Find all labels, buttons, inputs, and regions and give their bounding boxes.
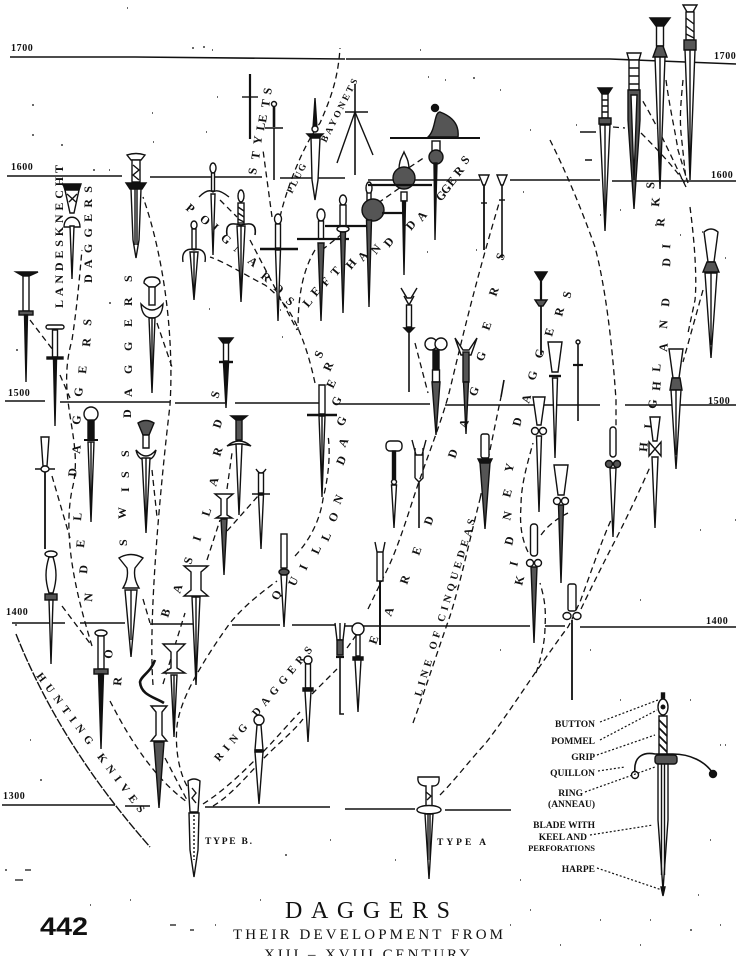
- dagger: Highland 5: [703, 229, 719, 358]
- label: Eared daggers: EARED DAGGERS: [366, 251, 508, 646]
- lineage: Swiss daggers: [143, 197, 172, 685]
- label: Swiss daggers: SWISS DAGGERS: [115, 275, 135, 546]
- dagger: ring 2: [254, 715, 264, 804]
- label: Highland dirks: HIGHLAND DIRKS: [636, 181, 674, 452]
- dagger: ring 1: [303, 656, 313, 742]
- dagger: Highland 2: [627, 53, 641, 209]
- dagger: Highland 3: [650, 18, 670, 189]
- lineage: plug bayonets: [280, 48, 340, 217]
- dagger: quillon straight: [260, 214, 298, 321]
- dagger: Rondel 4: [45, 551, 57, 664]
- dagger: eared ring pair B: [352, 623, 364, 712]
- label: Left hand daggers: LEFT HAND DAGGERS: [300, 153, 473, 310]
- dagger: quillon O: [183, 221, 205, 300]
- part labels: KEEL AND: [539, 833, 587, 843]
- lineage: hunting knives: [16, 634, 150, 847]
- lineage: Quillon daggers: [210, 150, 329, 556]
- rotated lineage labels: [34, 77, 674, 815]
- label: Rondel daggers: RONDEL DAGGERS: [65, 318, 125, 686]
- text: type labels: TYPE A: [437, 838, 486, 848]
- label: Ring daggers: RING DAGGERS: [212, 644, 315, 764]
- anatomy diagram: parts of a dagger: [528, 693, 716, 896]
- year labels: 1700: [11, 43, 33, 54]
- dagger: kidney 2: [554, 465, 568, 583]
- dagger: Basilard H1: [163, 644, 185, 737]
- lineage: ring daggers: [203, 634, 357, 806]
- dagger: kidney 4: [563, 584, 581, 700]
- label: Hunting knives: HUNTING KNIVES: [34, 671, 147, 815]
- label: Plug bayonets: PLUG: [286, 162, 309, 195]
- diagram dagger: [632, 693, 716, 896]
- dagger: Rondel 3: [35, 437, 55, 549]
- dagger: kidney 5: [606, 427, 620, 537]
- label: Quillon daggers: QUILLON DAGGERS: [268, 348, 352, 602]
- dagger: crescent pommel: [252, 469, 270, 549]
- dagger: Rondel 5: [94, 630, 108, 749]
- century rule lines: [2, 57, 736, 810]
- dagger: stylet 1: [242, 74, 258, 139]
- lineage: left hand daggers: [298, 157, 425, 330]
- part labels: QUILLON: [550, 769, 595, 779]
- dagger: Basilard curved root: [140, 660, 167, 808]
- part labels: RING: [558, 789, 584, 799]
- dagger: Swiss 2: [84, 407, 98, 522]
- dagger: left hand 3 shell: [362, 182, 403, 307]
- dagger: quillon large: [307, 385, 337, 497]
- part leader lines: [585, 700, 662, 890]
- dagger: Swiss wide: [119, 554, 143, 657]
- dagger: Highland 6: [669, 349, 683, 469]
- dagger: eared ring pair A: [335, 623, 345, 714]
- dashed lineage lines: [16, 48, 703, 847]
- title: DAGGERS: [285, 898, 450, 924]
- label: Landsknecht daggers: DAGGERS: [81, 186, 95, 283]
- dagger: eared 6: [478, 434, 492, 529]
- dagger: Rondel 1: [16, 272, 38, 382]
- dagger: eared 7: [375, 542, 385, 645]
- dagger: left hand 2: [325, 195, 370, 313]
- dagger: stylet 2: [265, 102, 283, 180]
- dagger: Rondel 2: [46, 325, 64, 426]
- part labels: POMMEL: [551, 737, 595, 747]
- text: type labels: TYPE B.: [205, 837, 252, 847]
- lineage: Highland dirks: [550, 80, 703, 428]
- dagger: Highland bowtie: [649, 417, 661, 528]
- year labels: 1500: [8, 388, 30, 399]
- label: Landsknecht daggers: LANDESKNECHT: [52, 165, 66, 308]
- year labels: 1600: [11, 162, 33, 173]
- label: Poignards: POIGNARDS: [183, 201, 297, 309]
- dagger: eared 3 horn: [455, 338, 477, 434]
- dagger: main gauche large: [390, 104, 480, 240]
- dagger: cinquedea stylet 2: [497, 175, 507, 258]
- dagger: plug bayonet: [307, 98, 323, 200]
- dagger: Highland 1: [598, 88, 612, 231]
- year labels: 1300: [3, 791, 25, 802]
- dagger: Highland 4: [683, 5, 697, 180]
- dagger: socket bayonet: [337, 84, 373, 175]
- part labels: GRIP: [571, 753, 595, 763]
- label: Kidney daggers: KIDNEY DAGGERS: [499, 289, 575, 587]
- dagger: quillon simple: [279, 534, 289, 627]
- year labels: 1500: [708, 396, 730, 407]
- dagger: eared 5: [412, 440, 426, 528]
- label: Landsknecht daggers: [52, 165, 95, 308]
- label: Plug bayonets: [286, 77, 360, 195]
- dagger: kidney top 1: [535, 272, 547, 355]
- dagger: Swiss 3: [136, 420, 156, 533]
- dagger: quillon C: [199, 163, 229, 255]
- dagger: kidney 1: [532, 397, 546, 512]
- part labels: BUTTON: [555, 720, 595, 730]
- title: [233, 898, 503, 956]
- label: Stylets: STYLETS: [245, 87, 275, 175]
- dagger: type B: [188, 779, 200, 877]
- year labels: 1400: [706, 616, 728, 627]
- year labels: 1400: [6, 607, 28, 618]
- part labels: PERFORATIONS: [528, 843, 595, 853]
- page number: 442: [40, 913, 88, 941]
- dagger: left hand 4 shell: [368, 152, 432, 275]
- dagger: left hand 1: [297, 209, 349, 321]
- part labels: [528, 720, 596, 875]
- dagger: quillon G: [227, 190, 255, 302]
- label: Plug bayonets: BAYONETS: [320, 77, 360, 144]
- part labels: BLADE WITH: [533, 821, 596, 831]
- dagger: kidney 3: [526, 524, 542, 643]
- dagger: Swiss crescent: [141, 277, 163, 393]
- title: THEIR DEVELOPMENT FROM: [233, 927, 503, 943]
- dagger: Swiss top: [126, 154, 146, 258]
- dagger: kidney cross: [573, 340, 583, 421]
- dagger: Basilard 3: [215, 494, 233, 575]
- lineage: kidney daggers: [440, 443, 650, 795]
- dagger: Basilard H2: [184, 566, 208, 685]
- year labels: 1700: [714, 51, 736, 62]
- dagger: type A: [417, 777, 441, 879]
- lineage: cinquedeas: [413, 499, 480, 723]
- dagger: eared 2 knob: [425, 338, 447, 435]
- label: Line of cinquedeas: LINE OF CINQUEDEAS: [413, 518, 478, 698]
- lineage: eared daggers: [368, 200, 500, 609]
- label: Basilards: BASILARDS: [158, 389, 226, 619]
- part labels: HARPE: [562, 865, 595, 875]
- dagger: Basilard 4: [227, 416, 251, 515]
- year labels: [3, 43, 736, 802]
- dagger: eared 1: [401, 288, 417, 392]
- year labels: 1600: [711, 170, 733, 181]
- lineage: Basilards: [163, 453, 277, 800]
- text: type labels: [205, 837, 486, 848]
- dagger: Basilard top: [219, 338, 233, 408]
- part labels: (ANNEAU): [548, 799, 595, 810]
- dagger: Landsknecht: [63, 184, 81, 279]
- dagger: cinquedea stylet 1: [479, 175, 489, 250]
- dagger: eared 4: [386, 441, 402, 528]
- dagger: kidney top 2: [548, 342, 562, 458]
- lineage: Rondel daggers: [30, 250, 187, 802]
